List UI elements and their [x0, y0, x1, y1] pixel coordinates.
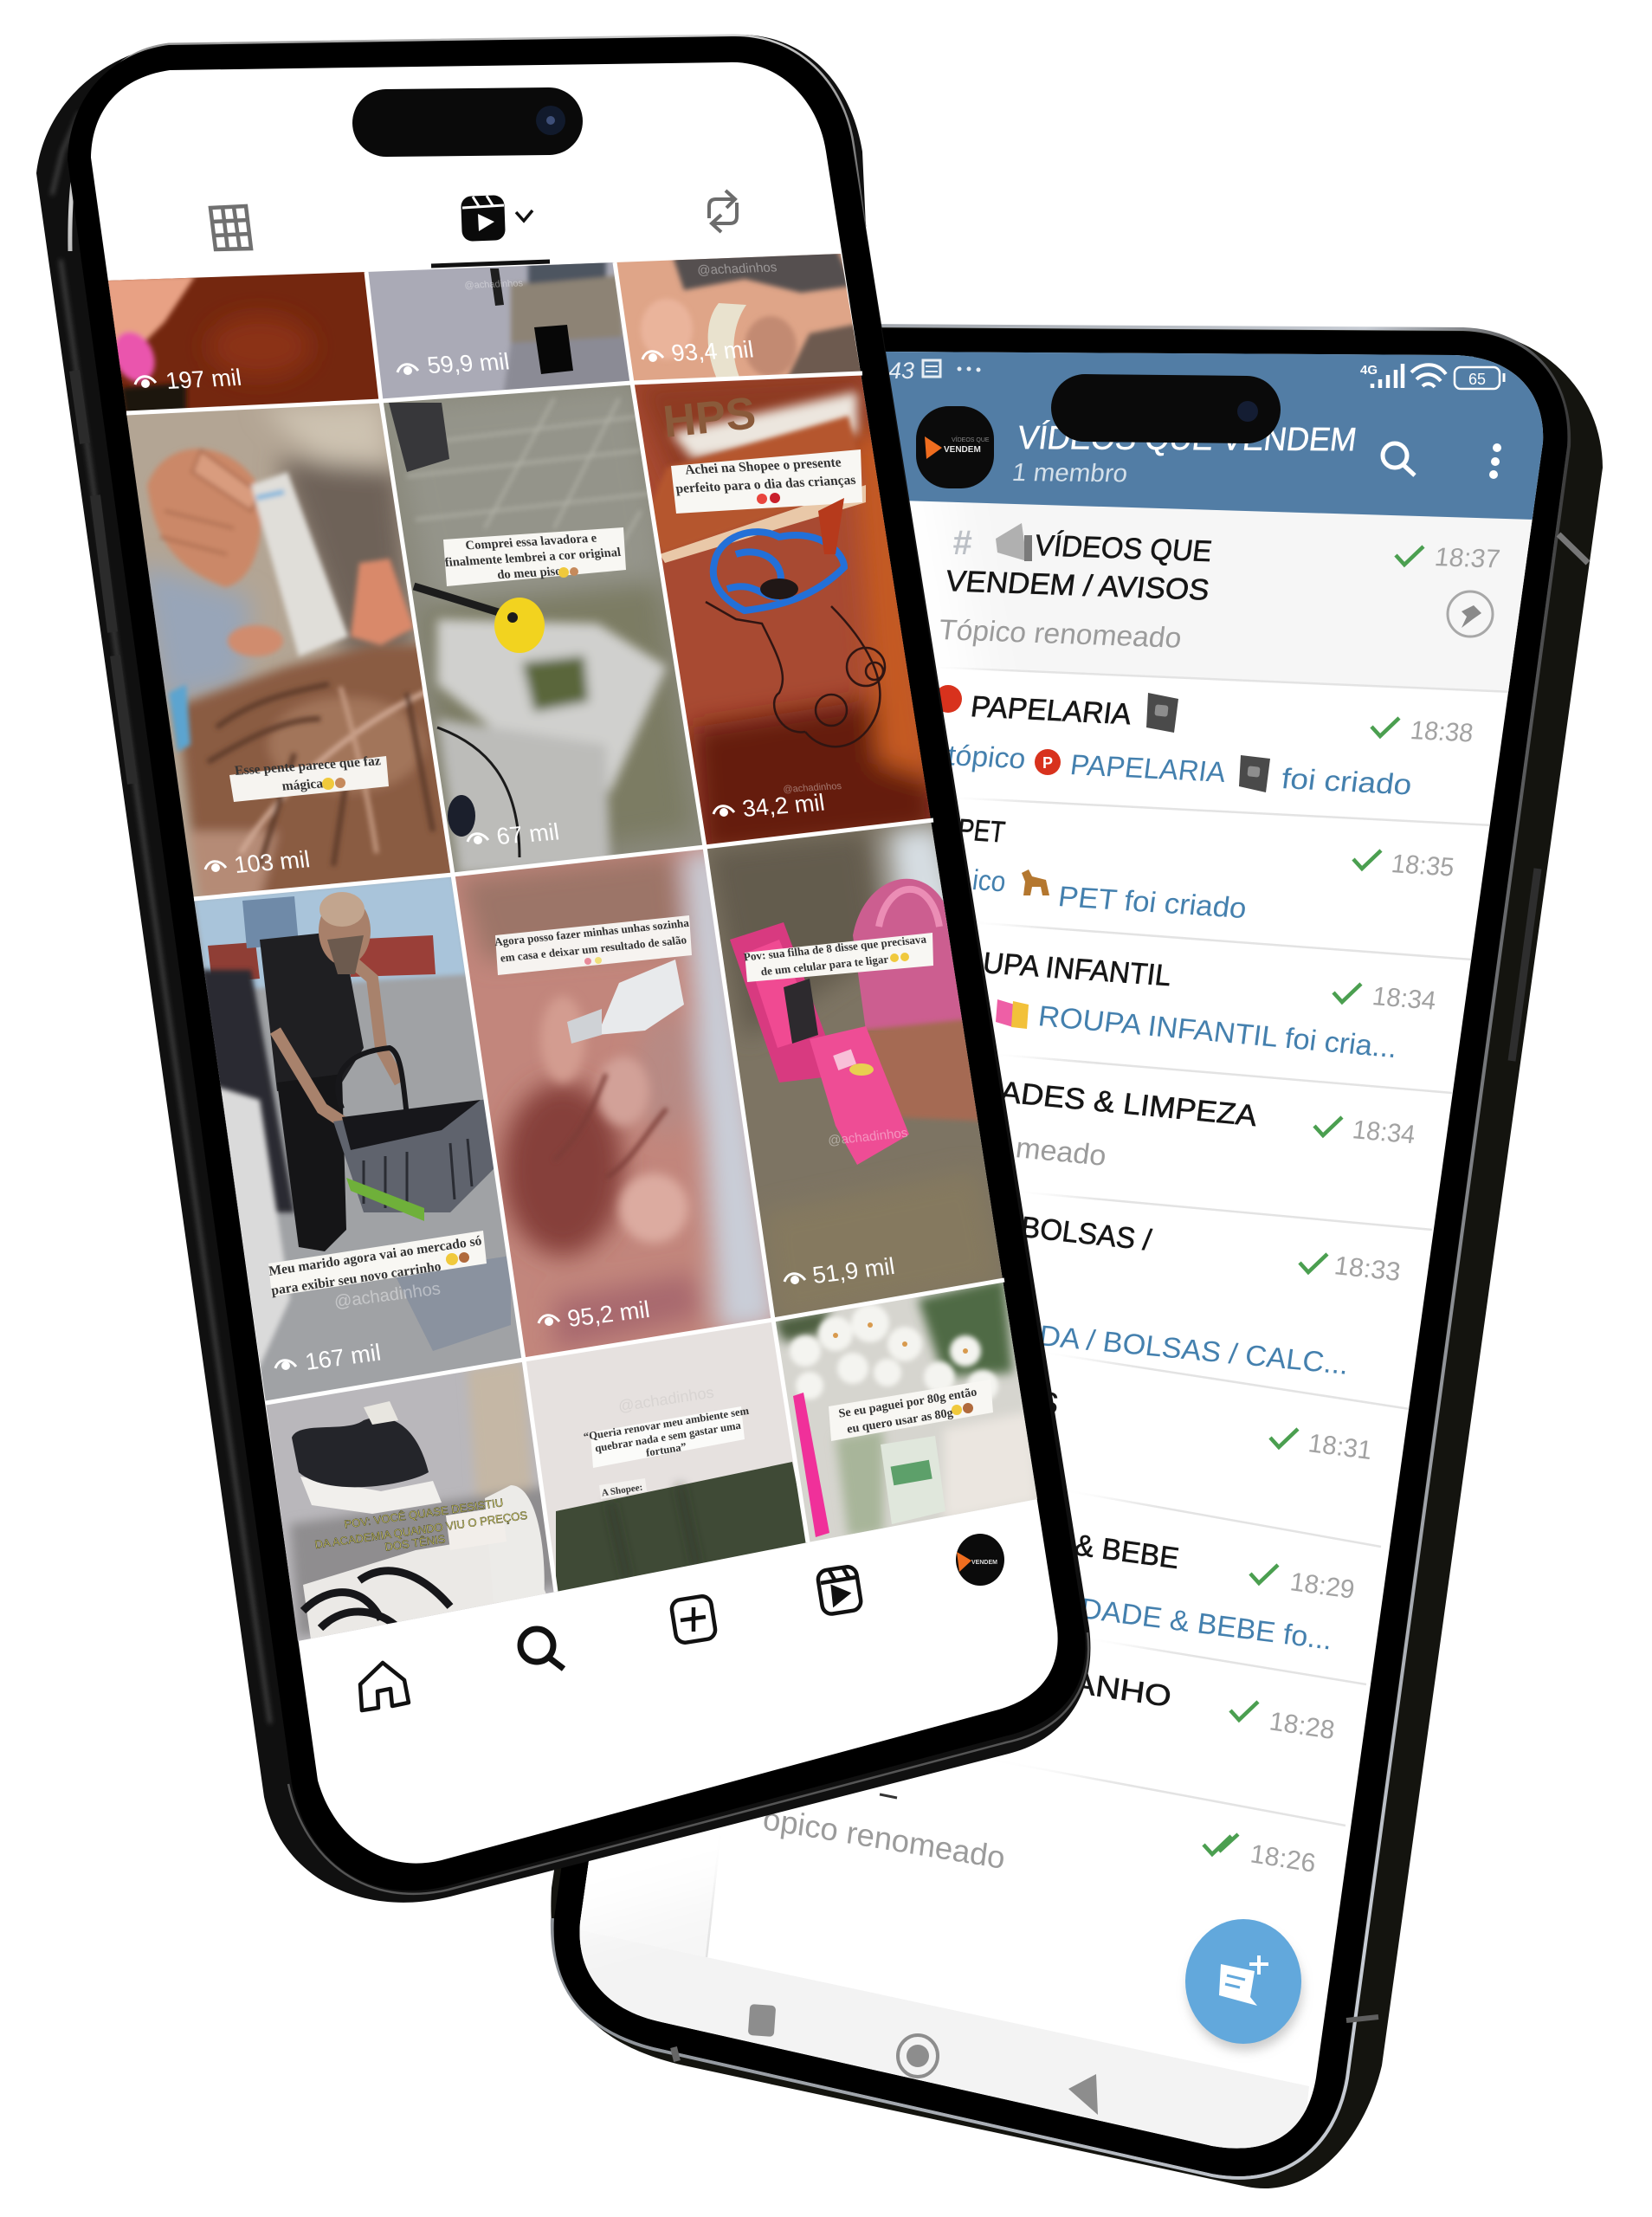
reel: 197 mil: 197 mil	[164, 364, 243, 394]
notch	[352, 87, 583, 157]
reel: 59,9 mil	[346, 251, 649, 416]
right phone: Telegram topics list	[551, 324, 1603, 2188]
row: utilidades e limpeza: meado	[1014, 1132, 1108, 1173]
row: banho: 18:28	[1268, 1707, 1336, 1745]
icon: reels	[816, 1566, 862, 1615]
row: last topic	[761, 1794, 1317, 1878]
reel: 95,2 mil: Agora posso fazer minhas unhas sozinha	[494, 916, 690, 948]
status bar: 4G	[1360, 363, 1378, 378]
reel: 51,9 mil: Pov: sua filha de 8 disse que precisava	[743, 933, 927, 964]
bottom navigation background	[580, 1929, 1309, 2149]
reel: 34,2 mil: HPS	[661, 388, 758, 448]
row: moda bolsas: DA / BOLSAS / CALC...	[1037, 1320, 1351, 1381]
row: avisos: VÍDEOS QUE	[1033, 528, 1214, 568]
reel: 103 mil: 103 mil	[232, 845, 312, 878]
reel: 59,9 mil: @achadinhos	[464, 278, 524, 291]
row: papelaria	[934, 685, 1475, 801]
phone body	[551, 326, 1603, 2188]
side details	[674, 534, 1588, 2061]
row: utilidades e limpeza: 18:34	[1351, 1115, 1416, 1149]
row: maternidade e bebe: 18:29	[1288, 1567, 1356, 1605]
row: avisos: #	[952, 524, 972, 562]
reel: 67 mil: do meu piso	[496, 565, 563, 582]
reel: 197 mil	[87, 242, 416, 433]
row: avisos: 18:37	[1433, 543, 1501, 574]
row: banho	[1071, 1666, 1336, 1745]
notch	[1051, 374, 1281, 443]
row: maternidade e bebe: & BEBE	[1073, 1529, 1181, 1575]
reel: ambiente: quebrar nada e sem gastar uma	[594, 1419, 742, 1454]
profile avatar: VENDEM	[971, 1560, 997, 1566]
icon: menu dots	[1489, 443, 1501, 479]
reel: 59,9 mil: 59,9 mil	[425, 347, 511, 378]
bottom navigation	[360, 1534, 1004, 1710]
row: last topic: ópico renomeado	[761, 1800, 1007, 1876]
row: papelaria: PAPELARIA	[969, 690, 1133, 731]
icon: search	[1383, 443, 1415, 475]
row: pet: 18:35	[1390, 850, 1455, 882]
reel: 51,9 mil	[693, 805, 1022, 1334]
row: papelaria: PAPELARIA	[1068, 749, 1229, 789]
reel: 34,2 mil: Achei na Shopee o presente	[684, 456, 842, 477]
row: avisos	[937, 523, 1501, 655]
reel: 167 mil: Meu marido agora vai ao mercado só	[268, 1233, 483, 1279]
reel: 34,2 mil: perfeito para o dia das crianças	[674, 473, 856, 496]
row: avisos: Tópico renomeado	[937, 614, 1184, 655]
silver frame edge	[70, 36, 864, 251]
reel: 167 mil: 167 mil	[303, 1339, 383, 1375]
reel: 103 mil	[113, 390, 468, 909]
group avatar: VÍDEOS QUE	[952, 436, 990, 443]
reel: ambiente: A Shopee:	[601, 1483, 643, 1499]
row: avisos: VENDEM / AVISOS	[944, 565, 1211, 607]
group title: VÍDEOS QUE VENDEM	[1016, 419, 1358, 458]
android navigation buttons	[748, 2004, 1098, 2115]
reel: shoes: DOS TÊNIS	[384, 1532, 447, 1554]
row: banho: ANHO	[1071, 1666, 1173, 1714]
pinned row background	[987, 503, 1534, 692]
reel: flowers	[762, 1273, 1048, 1550]
reel: 34,2 mil: @achadinhos	[783, 781, 842, 795]
reel: shoes: DA ACADEMIA QUANDO VIU O PREÇOS	[314, 1509, 528, 1551]
lower frame edge	[288, 1632, 1088, 1894]
reel: 93,4 mil	[606, 242, 874, 390]
reel: 103 mil: Esse pente parece que faz	[234, 753, 382, 779]
member count: 1 membro	[1010, 459, 1129, 488]
row: moda bolsas: 18:33	[1333, 1251, 1402, 1287]
reel: shoes	[260, 1342, 563, 1645]
reel: 167 mil: @achadinhos	[332, 1279, 442, 1312]
side buttons	[74, 371, 132, 784]
status bar: 43	[888, 358, 914, 384]
icon: home	[360, 1663, 409, 1710]
row: partial title: S	[1036, 1386, 1061, 1421]
group avatar	[916, 406, 994, 488]
row: utilidades e limpeza: ADES & LIMPEZA	[998, 1076, 1259, 1133]
row: papelaria: 18:38	[1409, 716, 1475, 748]
reel: 103 mil: mágica	[281, 776, 324, 794]
row: roupa infantil: ROUPA INFANTIL foi cria...	[1036, 1000, 1399, 1064]
profile avatar	[956, 1534, 1004, 1586]
tab icon: repost	[709, 191, 737, 232]
row: roupa infantil: UPA INFANTIL	[981, 947, 1173, 992]
reel: 93,4 mil: @achadinhos	[696, 260, 778, 278]
reel: 167 mil: para exibir seu novo carrinho	[270, 1259, 442, 1298]
reel: shoes: POV: VOCÊ QUASE DESISTIU	[343, 1496, 504, 1531]
reel: 67 mil: 67 mil	[494, 818, 561, 850]
silver frame edge	[552, 326, 1569, 2178]
reel: ambiente	[519, 1308, 814, 1602]
row: partial title: 18:31	[1307, 1429, 1373, 1465]
status bar: 65	[1468, 371, 1486, 388]
phone body	[36, 35, 1090, 1903]
reel: 67 mil: Comprei essa lavadora e	[465, 532, 598, 553]
screen content	[580, 352, 1543, 2149]
reel: 51,9 mil: de um celular para te ligar	[760, 953, 889, 978]
row: pet: ico	[971, 864, 1008, 898]
reel: 51,9 mil: @achadinhos	[827, 1126, 909, 1148]
reel: flowers: Se eu paguei por 80g então	[837, 1385, 978, 1421]
row: roupa infantil	[981, 947, 1437, 1064]
icon: search	[520, 1629, 564, 1669]
reel: 67 mil: finalmente lembrei a cor original	[444, 546, 622, 570]
reel: 34,2 mil	[623, 364, 944, 857]
row: papelaria: tópico	[945, 740, 1028, 775]
row: moda bolsas: BOLSAS /	[1019, 1211, 1153, 1257]
reel: 67 mil	[372, 372, 719, 883]
row: utilidades e limpeza	[998, 1076, 1416, 1173]
reel: 167 mil	[182, 866, 537, 1420]
row: last topic: 18:26	[1249, 1839, 1317, 1878]
floating action button	[1185, 1919, 1302, 2051]
reel: 95,2 mil: 95,2 mil	[565, 1296, 651, 1332]
black bezel	[68, 36, 1086, 1891]
reel: 95,2 mil: em casa e deixar um resultado de salão	[500, 933, 687, 965]
header bar	[886, 352, 1543, 520]
left phone: Instagram reels grid	[36, 35, 1090, 1903]
black bezel	[554, 328, 1567, 2176]
reel: 51,9 mil: 51,9 mil	[810, 1252, 896, 1289]
screen	[91, 62, 1058, 1864]
reel: 95,2 mil	[442, 840, 788, 1377]
row: partial title	[1036, 1386, 1373, 1465]
tab icon: grid	[210, 206, 251, 249]
icon: create	[670, 1595, 717, 1644]
row: roupa infantil: 18:34	[1371, 982, 1437, 1016]
row: pet	[956, 813, 1455, 925]
tab icon: reels	[461, 195, 532, 242]
row: moda bolsas	[1019, 1211, 1402, 1381]
reel: ambiente: fortuna”	[645, 1440, 687, 1459]
row: papelaria: foi criado	[1280, 763, 1414, 801]
side reflection	[52, 113, 270, 1723]
active tab indicator	[431, 262, 550, 266]
group avatar: VENDEM	[944, 445, 981, 455]
row: pet: PET foi criado	[1056, 881, 1249, 925]
status bar	[888, 358, 1504, 389]
reel: 93,4 mil: 93,4 mil	[669, 335, 755, 366]
reels grid	[87, 242, 1048, 1645]
row: maternidade e bebe	[1073, 1529, 1356, 1657]
reel: ambiente: “Queria renovar meu ambiente sem	[583, 1405, 750, 1443]
reel: 34,2 mil: 34,2 mil	[740, 789, 826, 822]
reel: flowers: eu quero usar as 80g	[846, 1406, 954, 1437]
row: maternidade e bebe: DADE & BEBE fo...	[1079, 1593, 1334, 1657]
row: pet: PET	[956, 813, 1007, 849]
grid separators	[126, 262, 1004, 1592]
row: papelaria: P	[1042, 754, 1053, 772]
reel: ambiente: @achadinhos	[617, 1384, 715, 1415]
